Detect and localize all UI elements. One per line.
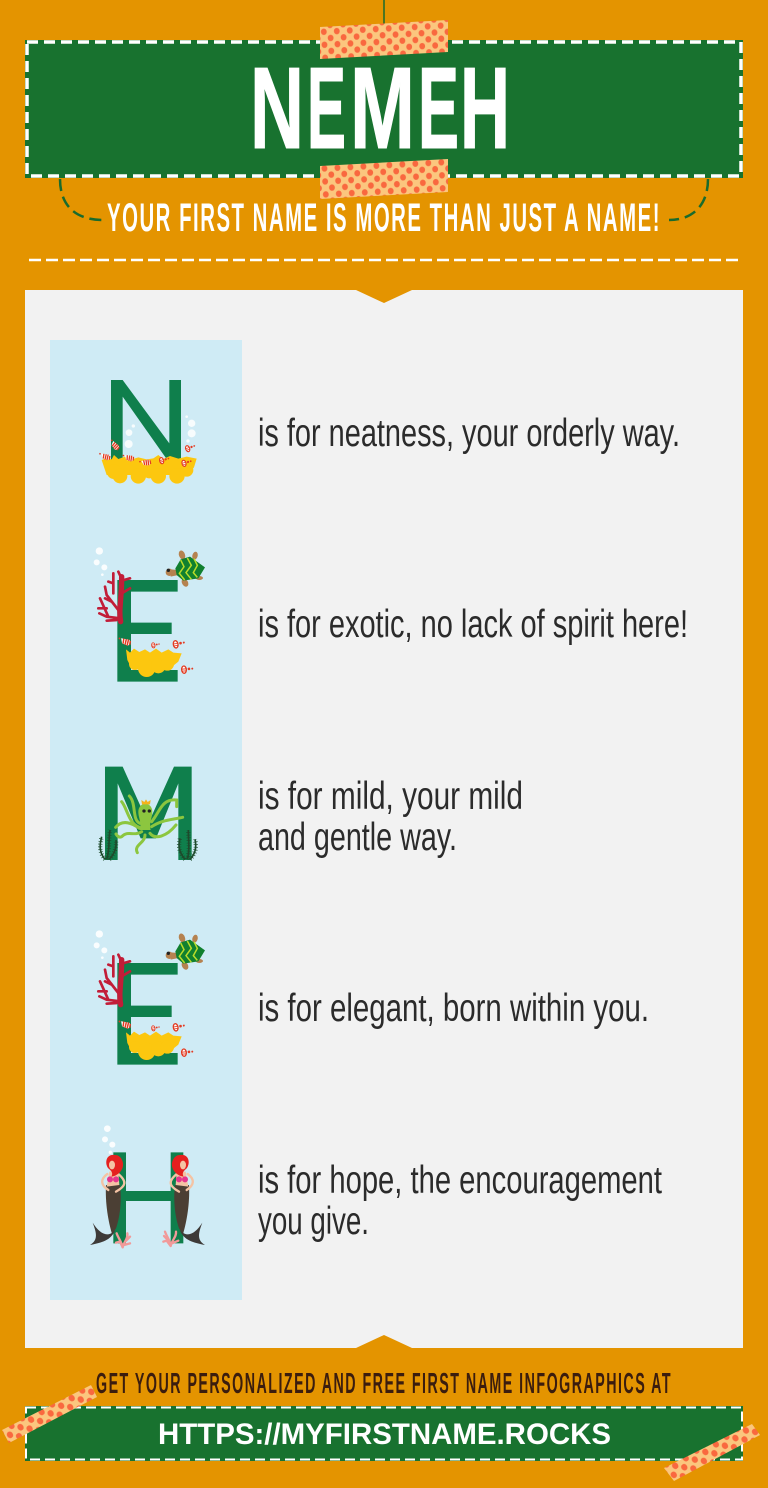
turtle bbox=[166, 550, 205, 588]
dashed connector: right bbox=[669, 179, 708, 220]
dashed divider bbox=[29, 259, 739, 261]
pink corals bbox=[116, 1232, 178, 1247]
tape: footer left bbox=[2, 1385, 97, 1443]
dashed connector: left bbox=[60, 179, 103, 220]
text: H bbox=[258, 1159, 662, 1243]
text: H: you give. bbox=[258, 1200, 369, 1243]
text: E: is for elegant, born within you. bbox=[258, 987, 649, 1030]
title: NEMEH: E bbox=[418, 43, 459, 173]
seaweed bbox=[100, 830, 196, 859]
text: M: and gentle way. bbox=[258, 816, 457, 859]
title: NEMEH: M bbox=[350, 43, 415, 173]
footer banner bbox=[25, 1406, 743, 1461]
panel: letter column bbox=[50, 340, 242, 1300]
tape: top bbox=[320, 20, 448, 59]
letter M illustration bbox=[100, 767, 196, 860]
text: M: is for mild, your mild bbox=[258, 775, 523, 818]
title: NEMEH bbox=[250, 43, 510, 173]
letter N illustration bbox=[98, 380, 197, 484]
panel: paper bbox=[25, 290, 743, 1348]
title banner bbox=[25, 40, 743, 178]
letter E illustration (second) bbox=[94, 930, 205, 1065]
sponge bbox=[126, 649, 182, 677]
footer url: HTTPS://MYFIRSTNAME.ROCKS bbox=[158, 1418, 611, 1451]
octopus bbox=[116, 796, 183, 853]
mermaid right bbox=[171, 1155, 205, 1245]
letter H illustration bbox=[90, 1125, 205, 1247]
hanging string bbox=[383, 0, 385, 24]
sponge bbox=[102, 455, 197, 484]
title: NEMEH: H bbox=[460, 43, 510, 173]
coral bbox=[98, 572, 130, 622]
text: M bbox=[258, 775, 523, 859]
mermaid left bbox=[90, 1155, 124, 1245]
title: NEMEH: N bbox=[250, 43, 304, 173]
letter E illustration (first) bbox=[94, 547, 205, 682]
tape: bottom bbox=[320, 159, 448, 199]
title: NEMEH: E bbox=[307, 43, 346, 173]
tape: footer right bbox=[664, 1424, 760, 1481]
